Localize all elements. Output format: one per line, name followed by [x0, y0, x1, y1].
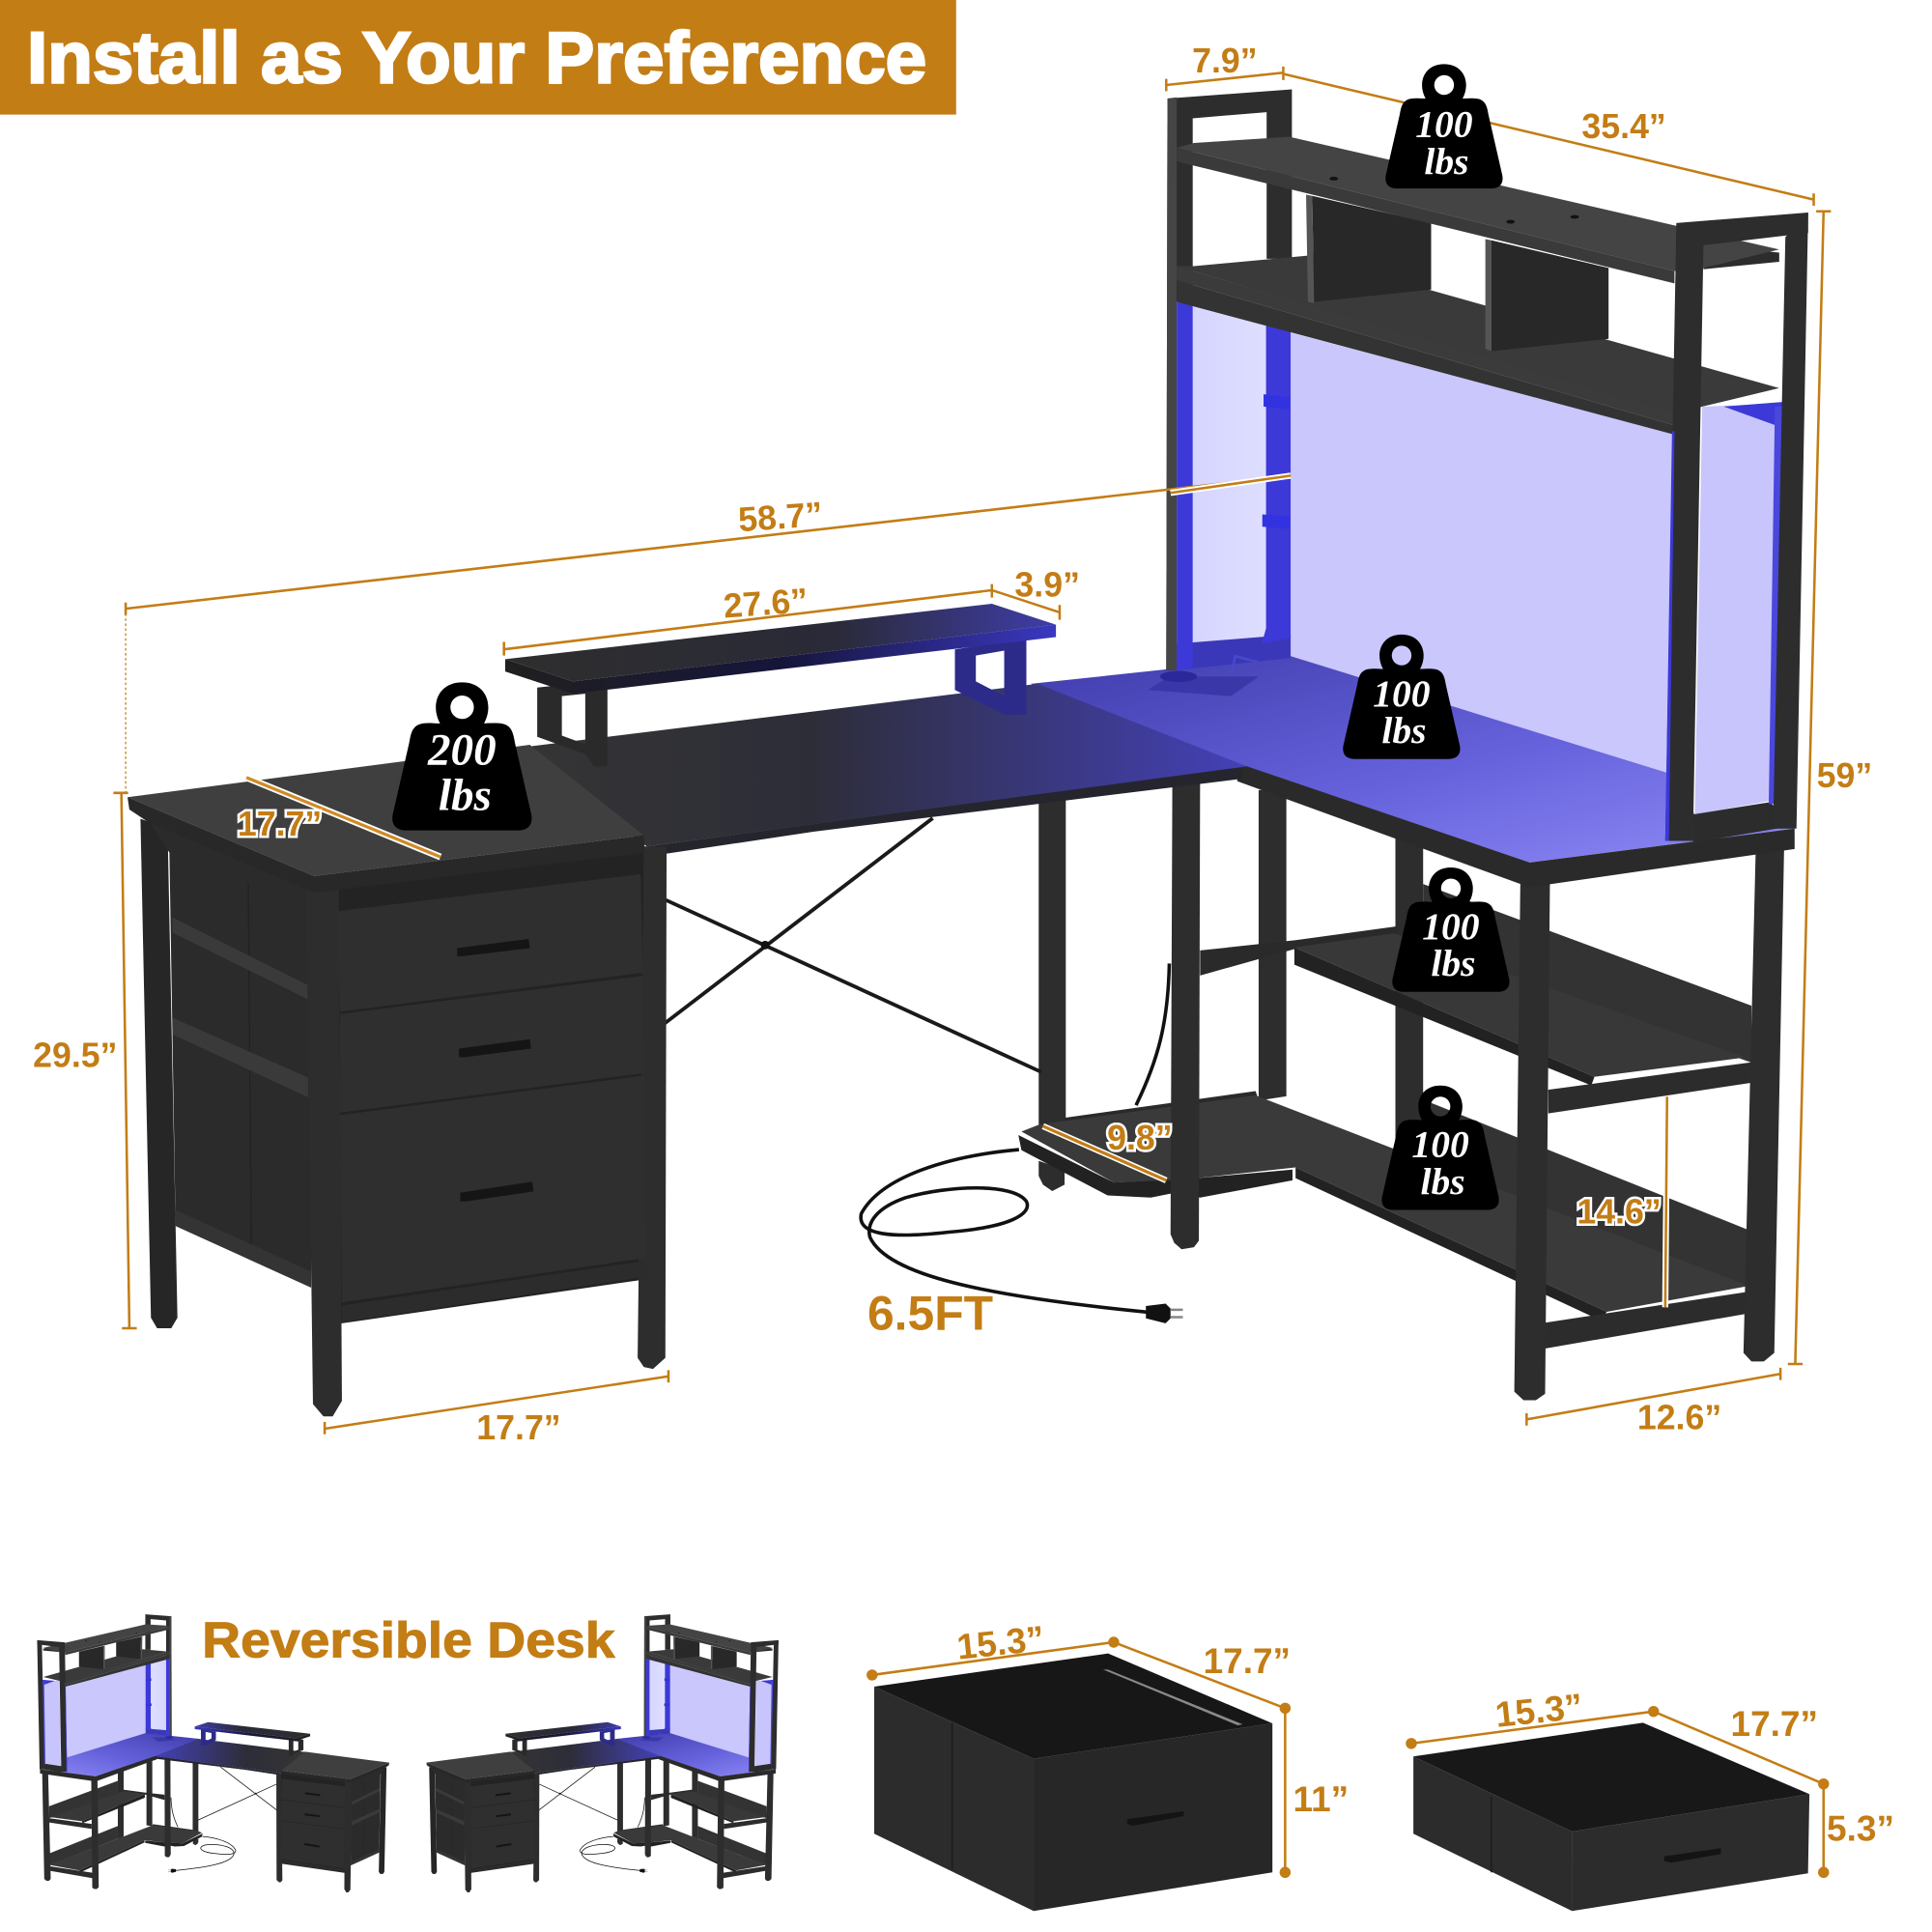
- dimension labels: 12.6”: [1637, 1399, 1721, 1437]
- power cord: [861, 963, 1169, 1312]
- drawer dimension lines: [867, 1636, 1829, 1878]
- weight: drawer top 200 lbs: lbs: [439, 770, 492, 820]
- drawer dimension labels: 11”: [1293, 1779, 1349, 1819]
- monitor riser: [505, 604, 1056, 766]
- reversible desk heading: Reversible Desk: [202, 1613, 615, 1669]
- dimension labels: 59”: [1817, 756, 1872, 795]
- dimension labels: [33, 42, 1872, 1447]
- weight: upper shelf 100 lbs: 100: [1422, 905, 1480, 948]
- weight: hutch top 100 lbs: [1385, 64, 1503, 188]
- dimension labels: 7.9”: [1192, 42, 1258, 80]
- cord length label: 6.5FT: [867, 1286, 993, 1340]
- drawer dimension labels: 17.7”: [1731, 1704, 1818, 1744]
- drawer dimension labels: 5.3”: [1827, 1809, 1894, 1849]
- weight: hutch top 100 lbs: lbs: [1424, 140, 1469, 183]
- weight: desktop 100 lbs: 100: [1373, 672, 1431, 715]
- dimension labels: 29.5”: [33, 1037, 117, 1075]
- weight: desktop 100 lbs: lbs: [1381, 709, 1427, 752]
- weight: lower shelf 100 lbs: lbs: [1421, 1160, 1465, 1203]
- title banner: [0, 0, 956, 115]
- x brace: [659, 818, 1041, 1072]
- weight: drawer top 200 lbs: [392, 682, 531, 831]
- desktop mid section: [518, 684, 1247, 854]
- dimension labels: 58.7”: [737, 495, 824, 539]
- dimension labels: 17.7”: [238, 805, 322, 843]
- mini desk: mirrored: [37, 1614, 389, 1892]
- drawer dimension labels: 15.3”: [1493, 1687, 1584, 1735]
- pedestal drawer unit: [128, 745, 667, 1416]
- drawer dimension labels: [955, 1618, 1894, 1849]
- small fabric drawer: [1413, 1722, 1809, 1911]
- weight: lower shelf 100 lbs: 100: [1411, 1123, 1469, 1166]
- dimension labels: 17.7”: [476, 1408, 561, 1447]
- shelf unit and legs: [1018, 773, 1784, 1401]
- dimension labels: 9.8”: [1107, 1119, 1173, 1157]
- dimension labels: 3.9”: [1014, 565, 1080, 604]
- weight: upper shelf 100 lbs: lbs: [1431, 942, 1476, 984]
- dimension labels: 14.6”: [1577, 1193, 1662, 1232]
- dimension labels: 27.6”: [723, 582, 809, 626]
- weight: hutch top 100 lbs: 100: [1415, 103, 1473, 146]
- desk illustration: [128, 89, 1808, 1416]
- title: Install as Your Preference: [27, 16, 926, 98]
- plug: [1146, 1303, 1182, 1323]
- drawer dimension labels: 15.3”: [955, 1618, 1046, 1667]
- weight: lower shelf 100 lbs: [1381, 1086, 1499, 1210]
- hutch back panels and wing top: [1031, 301, 1795, 887]
- weight: upper shelf 100 lbs: [1392, 867, 1510, 992]
- drawer dimension labels: 17.7”: [1204, 1641, 1291, 1681]
- hutch frame and shelves: [1148, 89, 1808, 842]
- large fabric drawer: [874, 1654, 1272, 1911]
- weight: desktop 100 lbs: [1343, 635, 1460, 759]
- mini desk: standard: [426, 1614, 779, 1892]
- dimension lines: [113, 67, 1831, 1435]
- dimension labels: 35.4”: [1581, 107, 1666, 146]
- weight: drawer top 200 lbs: 200: [427, 724, 497, 775]
